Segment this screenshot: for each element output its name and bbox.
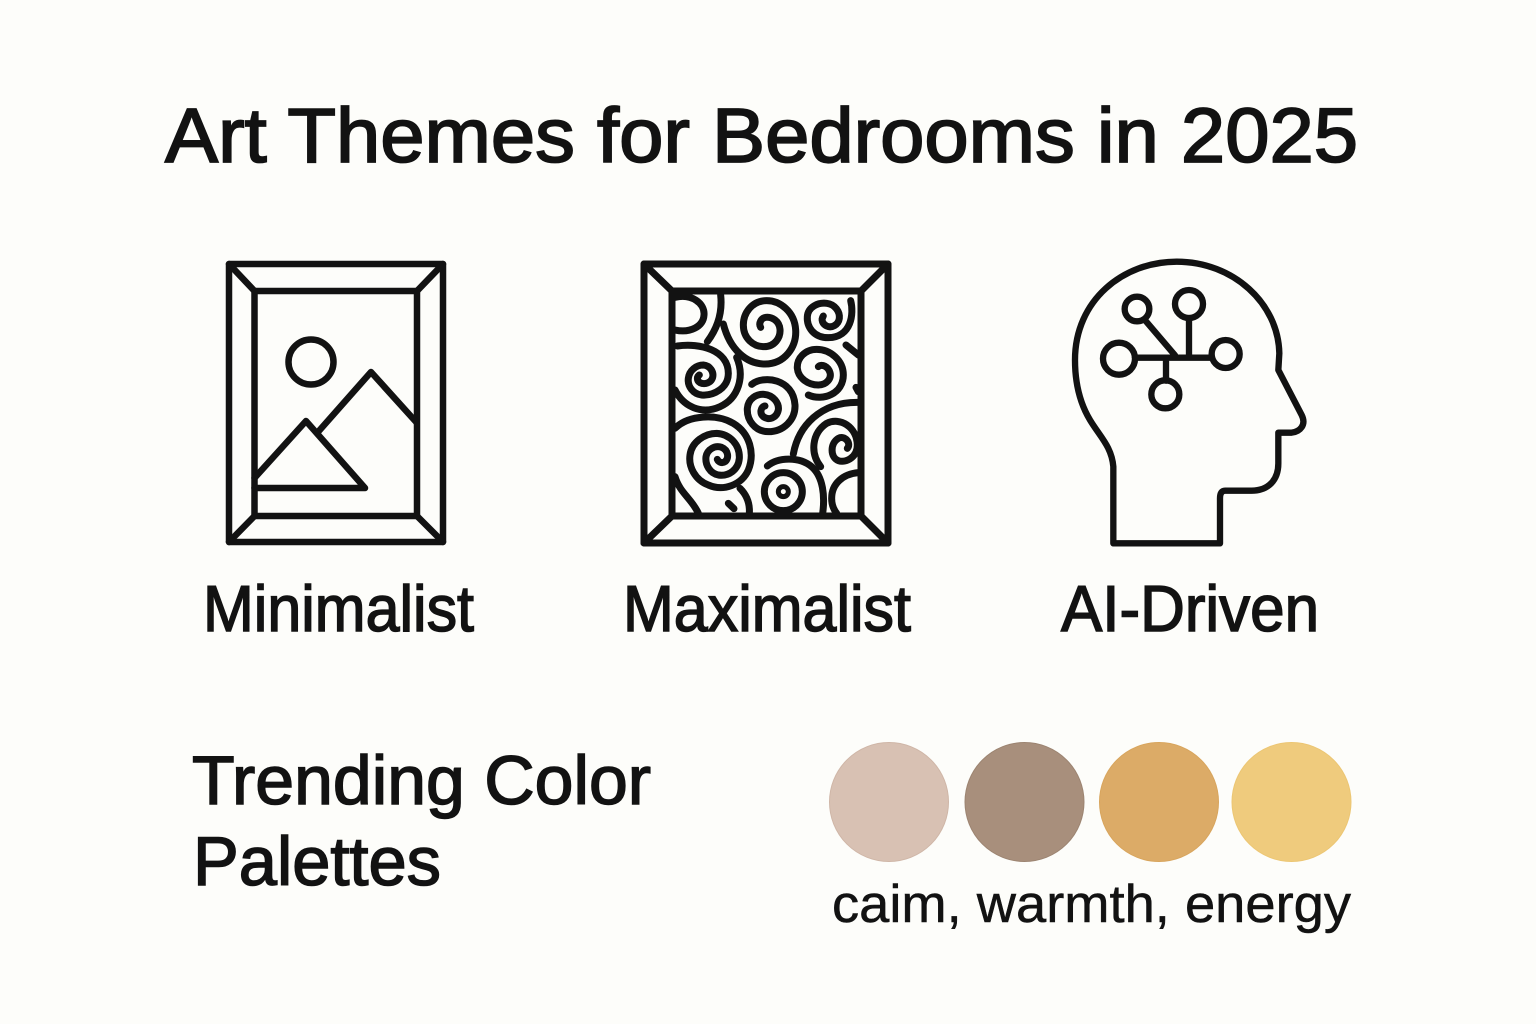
- heading: trending color palettes: Palettes: [193, 823, 441, 900]
- heading: trending color palettes: Trending Color: [192, 742, 651, 819]
- infographic canvas: [164, 105, 1356, 934]
- caption: palette moods: caim, warmth, energy: [832, 875, 1352, 934]
- icon: head with neural nodes: [1075, 262, 1303, 543]
- panel: color swatches: [830, 742, 1351, 862]
- panel: AI-driven theme: [1061, 262, 1319, 645]
- swatch: soft yellow: [1232, 742, 1351, 862]
- title: Art Themes for Bedrooms in 2025: [165, 93, 1358, 179]
- panel: maximalist theme: [623, 264, 911, 645]
- swatch: taupe: [965, 742, 1084, 862]
- label: maximalist: Maximalist: [623, 572, 911, 645]
- icon: minimalist framed landscape: [229, 264, 443, 542]
- label: minimalist: Minimalist: [203, 572, 474, 645]
- swatch: blush beige: [830, 742, 948, 862]
- heading: trending color palettes: [192, 742, 651, 900]
- swatch: ochre: [1100, 742, 1218, 862]
- panel: minimalist theme: [203, 264, 474, 645]
- label: AI-driven: AI-Driven: [1061, 572, 1319, 645]
- icon: maximalist framed swirl pattern: [644, 264, 888, 543]
